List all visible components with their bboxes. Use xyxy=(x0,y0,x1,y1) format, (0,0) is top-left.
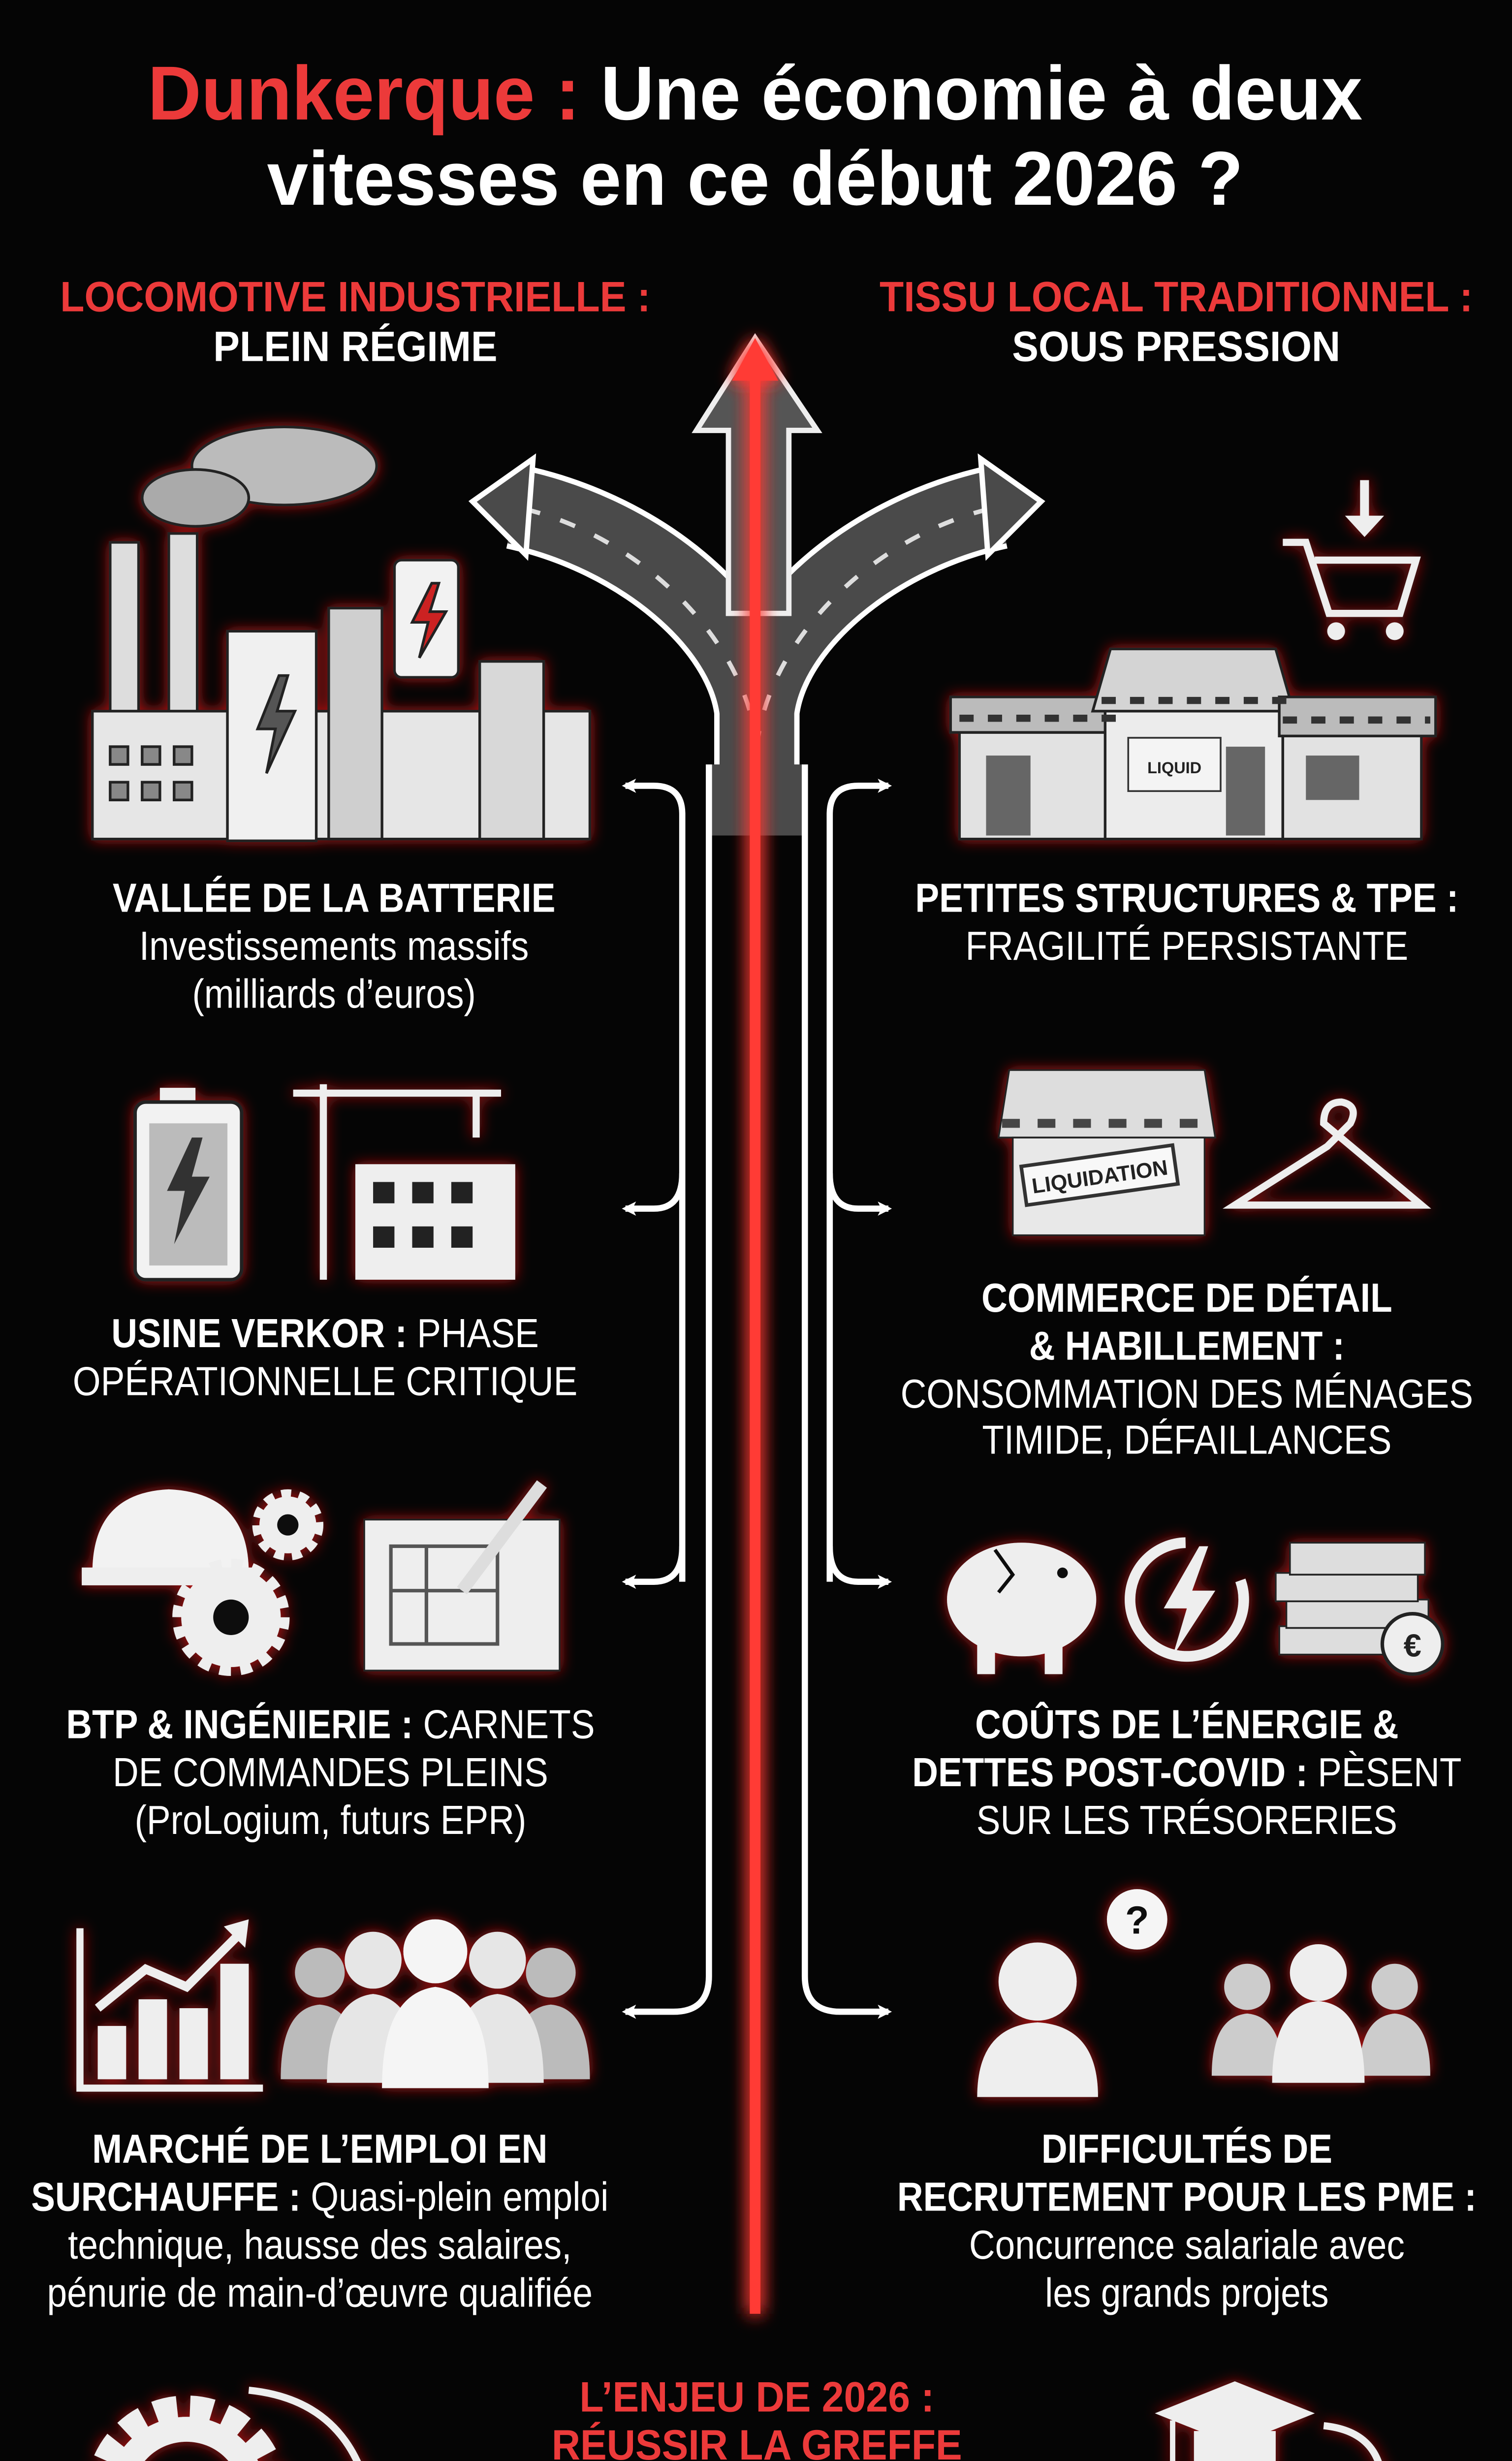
text: vallee batterie: Investissements massifs xyxy=(139,923,529,969)
icon: battery and crane xyxy=(135,1084,515,1280)
header: left: PLEIN RÉGIME xyxy=(213,322,498,370)
text: verkor: USINE VERKOR : PHASE xyxy=(111,1310,539,1356)
red central line xyxy=(732,338,778,2314)
icon: cart and shops xyxy=(950,480,1436,839)
text: recrutement xyxy=(897,2126,1477,2316)
text: energie: SUR LES TRÉSORERIES xyxy=(976,1797,1397,1843)
text: recrutement: Concurrence salariale avec xyxy=(969,2222,1405,2268)
icon: helmet gears blueprint xyxy=(82,1484,560,1671)
icon: shop liquidation and hanger: LIQUIDATION xyxy=(1031,1156,1169,1199)
header: left xyxy=(60,273,651,370)
text: vallee batterie: VALLÉE DE LA BATTERIE xyxy=(113,875,555,921)
text: vallee batterie: (milliards d’euros) xyxy=(192,971,476,1017)
icon: chart and workers xyxy=(80,1920,590,2088)
text: recrutement: les grands projets xyxy=(1045,2270,1329,2316)
icon: gears with arrows xyxy=(101,2390,384,2461)
heading: enjeu 2026: L’ENJEU DE 2026 : xyxy=(579,2373,934,2421)
text: btp xyxy=(66,1701,595,1843)
text: petites structures: PETITES STRUCTURES & TPE : xyxy=(915,875,1458,921)
icon: worried man and workers xyxy=(977,1889,1430,2097)
heading: enjeu 2026 xyxy=(552,2373,962,2461)
text: verkor: OPÉRATIONNELLE CRITIQUE xyxy=(73,1358,577,1404)
icon: cart and shops: LIQUID xyxy=(1147,759,1201,777)
text: commerce: & HABILLEMENT : xyxy=(1029,1323,1345,1368)
text: commerce: COMMERCE DE DÉTAIL xyxy=(981,1275,1392,1321)
text: recrutement: DIFFICULTÉS DE xyxy=(1041,2126,1332,2172)
icon: worried man and workers: ? xyxy=(1125,1898,1149,1942)
text: emploi: pénurie de main-d’œuvre qualifiée xyxy=(47,2270,593,2316)
text: commerce xyxy=(901,1275,1473,1463)
shops xyxy=(950,649,1436,839)
icon: factory xyxy=(93,427,590,841)
road fork xyxy=(472,459,1041,836)
text: petites structures xyxy=(915,875,1458,969)
text: energie xyxy=(912,1701,1461,1843)
text: verkor xyxy=(73,1310,577,1404)
icon: piggy bank, lightning, money: € xyxy=(1404,1627,1421,1663)
central arrow outline xyxy=(696,338,818,613)
text: commerce: CONSOMMATION DES MÉNAGES xyxy=(901,1371,1473,1417)
text: petites structures: FRAGILITÉ PERSISTANTE xyxy=(966,923,1408,969)
text: emploi: technique, hausse des salaires, xyxy=(68,2222,571,2268)
text: energie: DETTES POST-COVID : PÈSENT xyxy=(912,1749,1461,1795)
text: emploi: MARCHÉ DE L’EMPLOI EN xyxy=(92,2126,547,2172)
header: right xyxy=(880,273,1473,370)
text: btp: BTP & INGÉNIERIE : CARNETS xyxy=(66,1701,595,1747)
text: energie: COÛTS DE L’ÉNERGIE & xyxy=(975,1701,1399,1747)
text: commerce: TIMIDE, DÉFAILLANCES xyxy=(982,1417,1391,1463)
connector lines xyxy=(626,764,888,2012)
text: btp: (ProLogium, futurs EPR) xyxy=(135,1797,526,1843)
header: right: TISSU LOCAL TRADITIONNEL : xyxy=(880,273,1473,320)
title xyxy=(148,51,1362,221)
icon: grad cap and handshake xyxy=(1155,2381,1475,2461)
icon: shop liquidation and hanger xyxy=(999,1070,1421,1235)
title: Dunkerque : Une économie à deux xyxy=(148,51,1362,136)
text: btp: DE COMMANDES PLEINS xyxy=(113,1749,548,1795)
header: left: LOCOMOTIVE INDUSTRIELLE : xyxy=(60,273,651,320)
header: right: SOUS PRESSION xyxy=(1012,322,1340,370)
icon: piggy bank, lightning, money xyxy=(947,1543,1443,1674)
text: emploi xyxy=(31,2126,608,2316)
text: emploi: SURCHAUFFE : Quasi-plein emploi xyxy=(31,2174,608,2220)
title: vitesses en ce début 2026 ? xyxy=(267,136,1243,221)
text: vallee batterie xyxy=(113,875,555,1017)
text: recrutement: RECRUTEMENT POUR LES PME : xyxy=(897,2174,1477,2220)
